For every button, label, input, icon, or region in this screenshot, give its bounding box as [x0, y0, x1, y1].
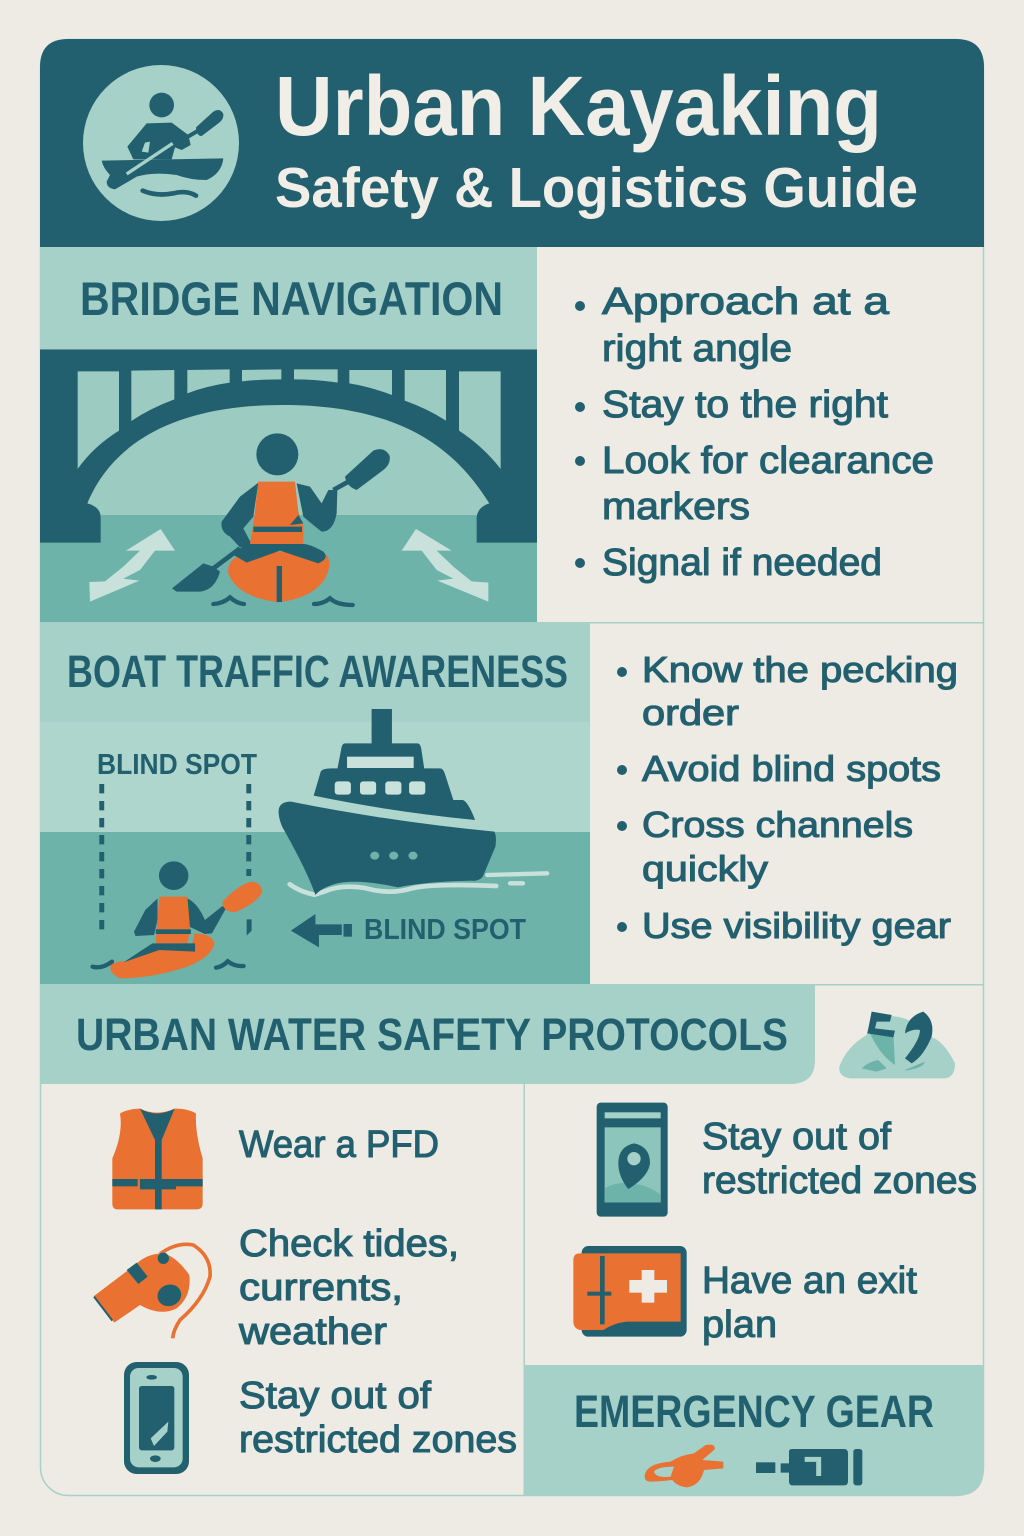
icon: capsized kayak on rock [839, 1012, 955, 1078]
text: stay out of restricted zones, right: Stay out of [702, 1116, 891, 1158]
label: blind spot top: BLIND SPOT [97, 749, 257, 781]
icon: flashlight [756, 1449, 862, 1485]
text: stay out of restricted zones, left: Stay out of [239, 1375, 431, 1417]
icon: phone [124, 1362, 189, 1474]
heading: bridge navigation: BRIDGE NAVIGATION [80, 272, 503, 325]
bullet list: boat traffic: order [642, 692, 739, 733]
bullet list: bridge navigation: markers [602, 486, 750, 528]
text: check tides [238, 1223, 459, 1353]
panel: urban water safety protocols [40, 985, 977, 1496]
text: check tides: Check tides, [239, 1223, 459, 1265]
icon: map phone with pin [597, 1103, 668, 1217]
text: stay out of restricted zones, right: restricted zones [702, 1160, 977, 1202]
text: have an exit plan: Have an exit [702, 1260, 917, 1302]
text: check tides: weather [238, 1311, 387, 1353]
bullet list: bridge navigation [575, 281, 934, 584]
bullet list: boat traffic: Cross channels [642, 804, 913, 845]
icon: first aid map [573, 1246, 687, 1337]
bullet list: boat traffic: Avoid blind spots [642, 748, 941, 789]
heading band [40, 985, 815, 1084]
text: stay out of restricted zones, left: restricted zones [239, 1419, 517, 1461]
subtitle: Safety & Logistics Guide [275, 156, 918, 220]
illustration: kayaker under bridge [40, 349, 537, 622]
header banner [40, 39, 984, 247]
icon: kayaker in blind spot [93, 861, 262, 978]
icon: life vest [112, 1109, 203, 1209]
illustration: ship and kayaker [93, 709, 547, 978]
bullet list: bridge navigation: Look for clearance [602, 440, 934, 482]
bullet list: bridge navigation: Signal if needed [602, 542, 882, 584]
text: stay out of restricted zones, right [702, 1116, 977, 1202]
panel: bridge navigation [40, 247, 537, 622]
heading: boat traffic awareness: BOAT TRAFFIC AWARENESS [67, 646, 568, 697]
icon: ship [279, 709, 547, 895]
bullet list: boat traffic: quickly [642, 848, 768, 889]
text: check tides: currents, [239, 1267, 403, 1309]
icon: kayaker badge [83, 65, 239, 221]
heading: urban water safety protocols: URBAN WATER SAFETY PROTOCOLS [76, 1009, 788, 1060]
bullet list: boat traffic: Use visibility gear [642, 905, 951, 946]
text: have an exit plan: plan [702, 1304, 777, 1346]
icon: whistle [94, 1244, 210, 1338]
text: stay out of restricted zones, left [239, 1375, 517, 1461]
arrow: blind spot [291, 914, 352, 947]
bullet list: boat traffic [617, 649, 958, 946]
panel: boat traffic awareness [40, 622, 590, 984]
bullet list: bridge navigation: right angle [602, 328, 792, 370]
bullet list: boat traffic: Know the pecking [642, 649, 958, 690]
icon: orange whistle [645, 1445, 723, 1487]
text: wear a pfd: Wear a PFD [239, 1124, 439, 1166]
title: Urban Kayaking [275, 59, 882, 153]
bullet list: bridge navigation: Stay to the right [602, 384, 888, 426]
label: blind spot with arrow: BLIND SPOT [364, 914, 526, 946]
text: have an exit plan [702, 1260, 917, 1346]
heading: emergency gear: EMERGENCY GEAR [574, 1386, 934, 1437]
bullet list: bridge navigation: Approach at a [602, 281, 890, 323]
panel: emergency gear [524, 1365, 984, 1496]
